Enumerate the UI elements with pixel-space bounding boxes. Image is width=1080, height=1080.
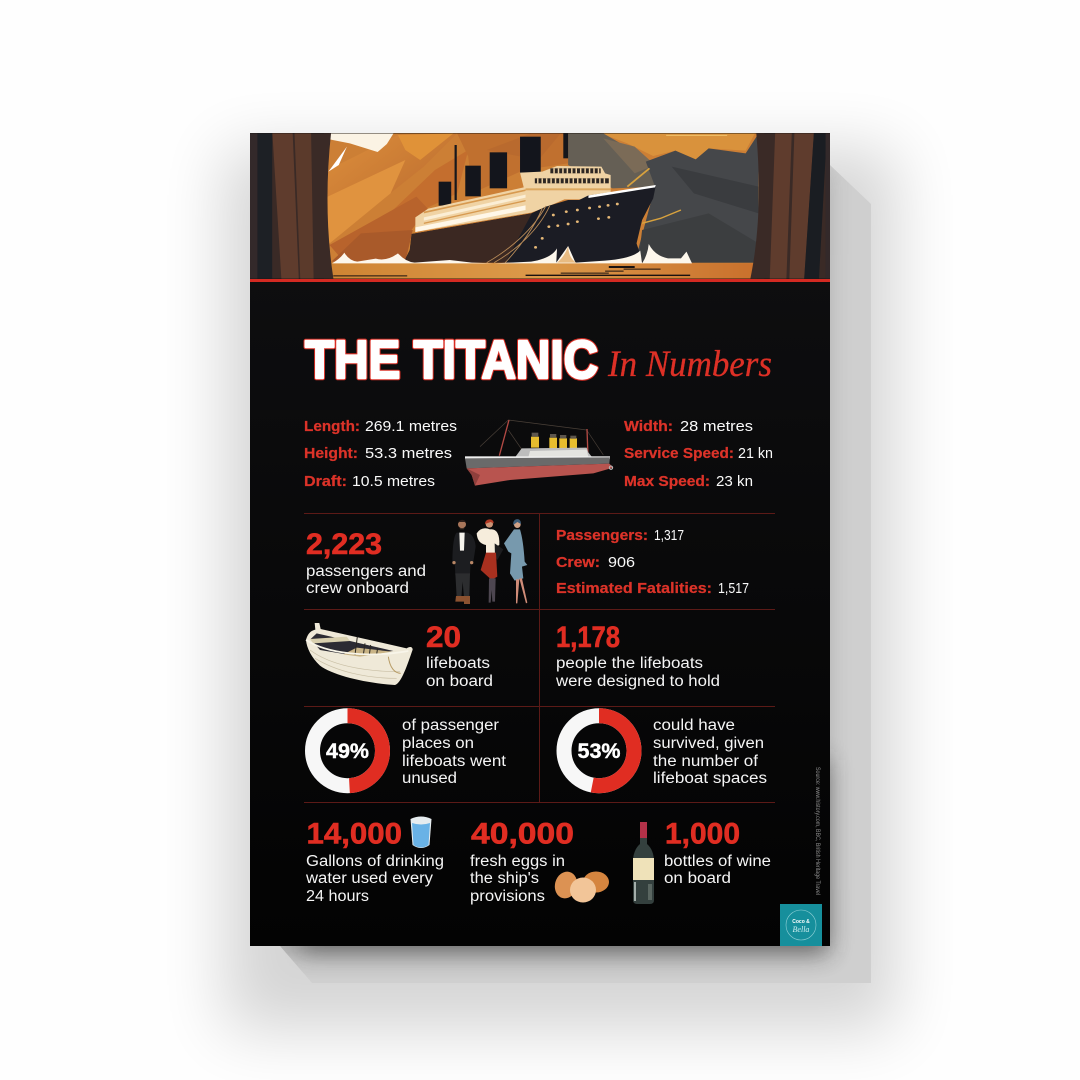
stat: passengers, crew, fatalities: 1,517 (718, 580, 749, 597)
stat: 14,000 gallons: water used every (305, 870, 433, 887)
cast shadow of poster (280, 165, 871, 983)
stat: passengers, crew, fatalities: Passengers: (556, 528, 648, 544)
stat: passengers, crew, fatalities: Crew: (556, 555, 600, 571)
title: THE TITANIC (305, 330, 598, 390)
grid lines (304, 513, 775, 802)
title: THE TITANIC (305, 330, 598, 390)
mast rear and funnels (439, 133, 568, 206)
stat: 1,178 capacity (555, 621, 720, 690)
stat: 2,223 onboard: 2,223 (306, 528, 382, 561)
logo: Coco and Bella: Bella (793, 925, 809, 934)
ship dimensions right: Max Speed: (624, 474, 710, 490)
stat: 20 lifeboats: on board (426, 673, 493, 690)
stat: 40,000 eggs: provisions (470, 888, 545, 905)
hull (404, 185, 656, 263)
stat text: 53% could have survived: survived, given (653, 735, 764, 752)
ship dimensions right: Width: (624, 419, 673, 435)
left curtain (250, 130, 334, 280)
donut chart: 53% (564, 716, 634, 786)
stat: 1,000 wine: on board (664, 870, 731, 887)
stat: 20 lifeboats: 20 (426, 621, 461, 654)
logo: Coco and Bella (780, 904, 822, 946)
orange mountains (328, 133, 568, 262)
stat: 14,000 gallons (305, 818, 444, 905)
source credit: Source: www.history.com, BBC, British Heritage Travel (814, 767, 820, 895)
stat: 2,223 onboard (306, 528, 426, 597)
red banner rule (250, 279, 830, 282)
stat: 40,000 eggs (470, 818, 574, 905)
icon: ship side view (465, 420, 613, 486)
grey mountain behind ship (568, 133, 657, 188)
water streaks (333, 266, 690, 276)
ship dimensions left: Length: (304, 419, 360, 435)
stat: 14,000 gallons: 14,000 (306, 818, 402, 850)
stat text: 53% could have survived: could have (653, 717, 735, 734)
ship dimensions right: Service Speed: (624, 446, 734, 462)
icon: wine bottle (633, 822, 654, 904)
stat: 40,000 eggs: the ship's (470, 870, 539, 887)
stat: passengers, crew, fatalities: Estimated Fatalities: (556, 581, 712, 597)
stat: passengers, crew, fatalities: 906 (608, 554, 635, 571)
superstructure (415, 166, 611, 232)
ship dimensions right (624, 418, 773, 490)
ship dimensions left: 10.5 metres (352, 473, 435, 490)
scene background (324, 133, 764, 279)
stat text: 49% unused: places on (402, 735, 474, 752)
woman in red (477, 519, 503, 603)
poster (250, 130, 830, 946)
title script: In Numbers (607, 344, 772, 385)
infographic mockup (198, 122, 922, 1058)
stat: 1,178 capacity: 1,178 (556, 621, 620, 654)
icon: 1910s passengers (452, 519, 527, 604)
waves (332, 244, 692, 263)
stat text: 53% could have survived: lifeboat spaces (653, 770, 767, 787)
banner illustration: ship between curtains (250, 130, 830, 280)
donut chart: 49% (312, 716, 382, 786)
stat text: 53% could have survived (653, 717, 767, 787)
man (452, 520, 476, 604)
logo: Coco and Bella: Coco & (792, 919, 810, 925)
donut chart: 53%: 53% (578, 740, 621, 763)
upper right sky (601, 133, 755, 159)
stat: 20 lifeboats: lifeboats (426, 655, 490, 672)
white sky patch (330, 133, 394, 152)
stat: 1,000 wine (664, 818, 771, 887)
stat text: 49% unused (402, 717, 507, 787)
ship dimensions left: 269.1 metres (365, 418, 457, 435)
donut chart: 49%: 49% (326, 740, 369, 763)
ship dimensions left (304, 418, 457, 490)
ship dimensions left: Height: (304, 446, 358, 462)
stat: 1,178 capacity: people the lifeboats (556, 655, 703, 672)
right curtain (750, 130, 830, 280)
stat text: 49% unused: unused (402, 770, 457, 787)
ship dimensions right: 28 metres (680, 418, 753, 435)
stat: 14,000 gallons: Gallons of drinking (306, 853, 444, 870)
icon: lifeboat (306, 623, 413, 685)
stat: passengers, crew, fatalities: 1,317 (654, 527, 684, 544)
stat: 1,178 capacity: were designed to hold (555, 673, 720, 690)
ship dimensions right: 21 kn (738, 445, 773, 462)
stat: 1,000 wine: 1,000 (665, 818, 740, 850)
icon: glass of water (410, 816, 432, 848)
stat: 2,223 onboard: passengers and (306, 563, 426, 580)
soft ambient shadow (225, 150, 895, 1030)
woman in blue (504, 519, 527, 603)
ship dimensions left: Draft: (304, 474, 347, 490)
ship dimensions left: 53.3 metres (365, 445, 452, 462)
stat: 14,000 gallons: 24 hours (306, 888, 369, 905)
stat: 40,000 eggs: fresh eggs in (470, 853, 565, 870)
water (330, 263, 757, 279)
stat: 20 lifeboats (426, 621, 493, 690)
stat: 1,000 wine: bottles of wine (664, 853, 771, 870)
stat text: 49% unused: lifeboats went (402, 753, 507, 770)
stat text: 49% unused: of passenger (402, 717, 499, 734)
stat: 2,223 onboard: crew onboard (306, 580, 409, 597)
stat: passengers, crew, fatalities (556, 527, 749, 597)
stat: 40,000 eggs: 40,000 (471, 818, 574, 850)
icon: eggs (552, 869, 609, 902)
stat text: 53% could have survived: the number of (653, 753, 759, 770)
dark mountains right (635, 133, 759, 263)
ship dimensions right: 23 kn (716, 473, 753, 490)
